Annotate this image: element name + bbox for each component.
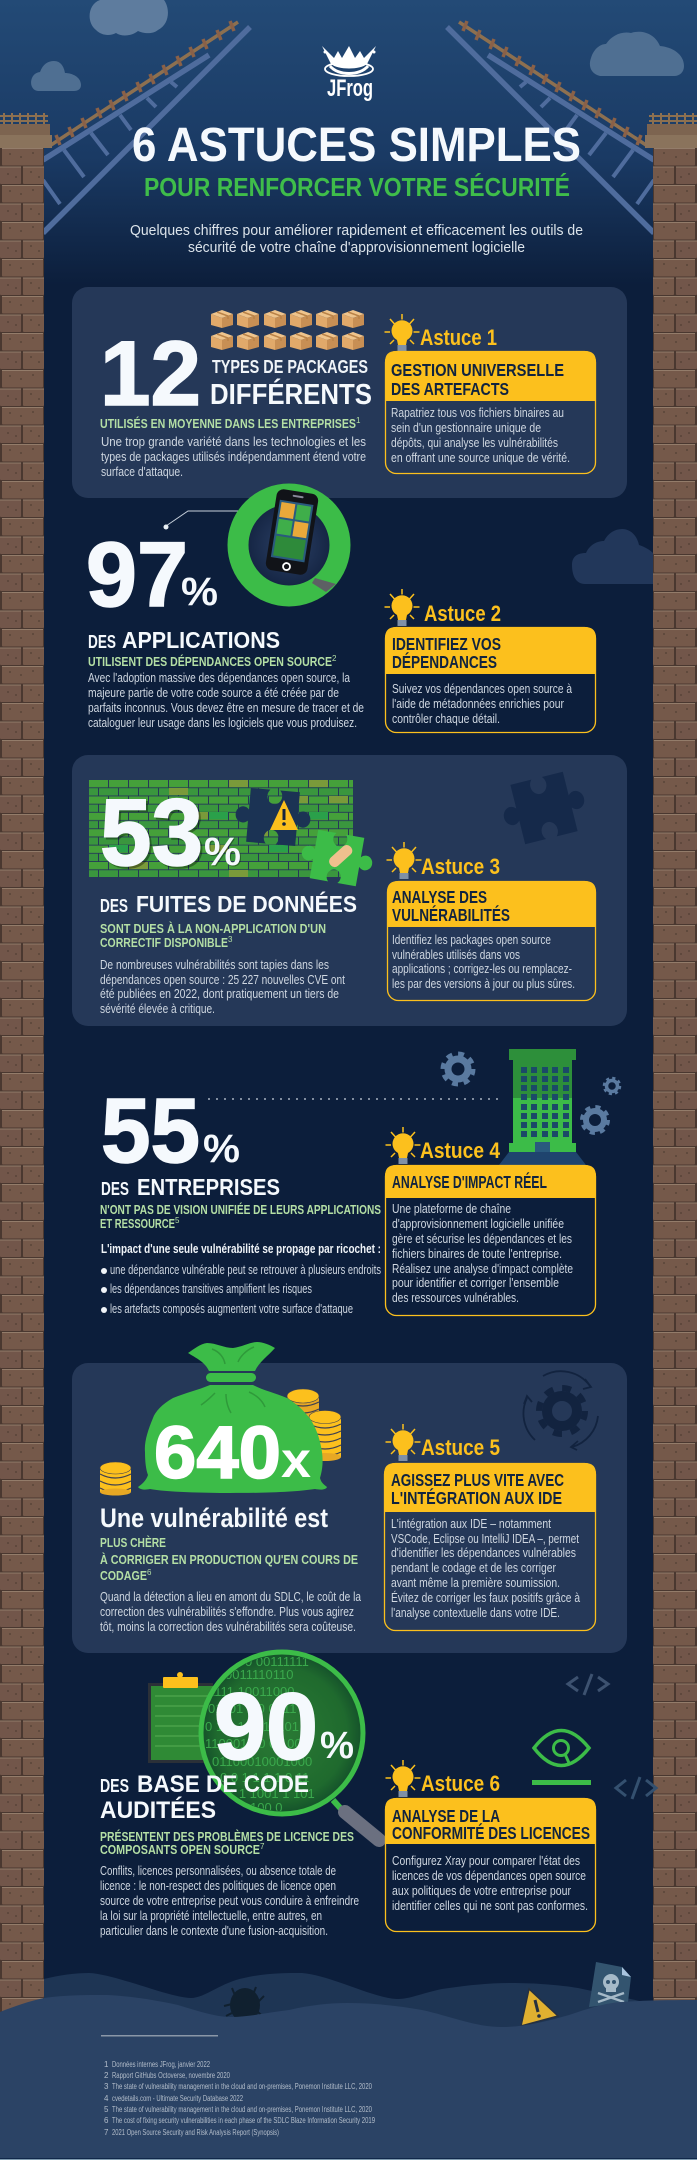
- tip card 3: [387, 881, 596, 1000]
- tip label 5: Astuce 5: [421, 1435, 500, 1460]
- JFrog logo: [322, 46, 376, 102]
- body text 2: parfaits inconnus. Vous devez être en mesure de tracer et de: [88, 701, 364, 715]
- panel: tip 1: [72, 287, 627, 498]
- tip card 4: ANALYSE D'IMPACT RÉEL: [392, 1171, 547, 1192]
- tip card 1: en offrant une source unique de vérité.: [391, 451, 570, 465]
- subtitle: POUR RENFORCER VOTRE SÉCURITÉ: [144, 172, 570, 202]
- tip label 3: Astuce 3: [421, 854, 500, 879]
- title: 6 ASTUCES SIMPLES: [132, 119, 581, 172]
- stat: 640: 640: [154, 1411, 281, 1494]
- connector dot: [164, 524, 168, 530]
- icon: magnifying glass: 110001 10 0 100: [205, 1736, 302, 1751]
- section: tip 2: [86, 488, 653, 732]
- tip card 3: vulnérables utilisés dans vos: [392, 948, 520, 962]
- dotted line: [208, 1098, 504, 1100]
- stat: 90: 90: [214, 1674, 318, 1780]
- icon: magnifying glass: 0 00111111: [245, 1654, 309, 1669]
- tip card 3: applications ; corrigez-les ou remplacez-: [392, 962, 572, 976]
- heading: base de code auditées: [100, 1771, 309, 1824]
- footnote mark 6: 6: [147, 1568, 152, 1577]
- body text 3: sévérité élevée à critique.: [100, 1002, 215, 1016]
- body text 1: Une trop grande variété dans les technologies et les: [101, 435, 366, 449]
- icon: skull document: [589, 1962, 631, 2007]
- tip card 2: IDENTIFIEZ VOS: [392, 634, 501, 654]
- body text 6: licence : le non-respect des politiques de licence open: [100, 1879, 336, 1893]
- footnote mark 1: 1: [356, 416, 361, 425]
- stat: 55: 55: [101, 1080, 200, 1182]
- tip card 3: les par des versions à jour ou plus sûres.: [392, 977, 575, 991]
- icon: eye: [534, 1730, 589, 1766]
- body text 6: la loi sur la propriété intellectuelle, entre autres, en: [100, 1909, 322, 1923]
- tip card 6: ANALYSE DE LA: [392, 1806, 500, 1826]
- heading: base de code auditées: BASE DE CODE: [137, 1771, 309, 1798]
- subheading 6: COMPOSANTS OPEN SOURCE: [100, 1842, 260, 1857]
- references: 6: [104, 2116, 109, 2125]
- drawbridge: left: [43, 21, 250, 233]
- references: cvedetails.com - Ultimate Security Database 2022: [112, 2094, 243, 2103]
- references: Données internes JFrog, janvier 2022: [112, 2060, 210, 2069]
- tip card 5: L'INTÉGRATION AUX IDE: [391, 1487, 562, 1508]
- body text 2: majeure partie de votre code source a été créée par de: [88, 686, 339, 700]
- icon: light bulb 3: [386, 842, 422, 879]
- icon: light bulb 6: [386, 1760, 420, 1797]
- tip card 5: AGISSEZ PLUS VITE AVEC: [391, 1470, 564, 1490]
- intro text: Quelques chiffres pour améliorer rapidement et efficacement les outils de: [130, 223, 583, 239]
- body text 2: [88, 671, 364, 730]
- references: 7: [104, 2128, 109, 2137]
- bullet list: [101, 1263, 381, 1316]
- tip card 6: aux politiques de votre entreprise pour: [392, 1884, 571, 1898]
- cloud: right large: [590, 32, 684, 76]
- tip card 5: [384, 1463, 596, 1630]
- icon: magnifying glass: 1 1 1001 1 101: [228, 1786, 315, 1801]
- icon: light bulb 2: [384, 589, 420, 626]
- references: [104, 2060, 375, 2137]
- body text 5: correction des vulnérabilités s'effondre. Plus vous agirez: [100, 1605, 354, 1619]
- heading: des: DES: [88, 631, 116, 652]
- tip label 6: Astuce 6: [421, 1771, 500, 1796]
- footnote mark 3: 3: [228, 935, 233, 944]
- icon: code tag right: [616, 1777, 656, 1799]
- icon: magnifying glass: 0 1 0 1 1010101: [205, 1719, 299, 1734]
- icon: clipboard: [148, 1672, 213, 1763]
- body text 2: Avec l'adoption massive des dépendances open source, la: [88, 671, 350, 685]
- front wave: [0, 1995, 697, 2160]
- references: 4: [104, 2094, 109, 2103]
- references: 2: [104, 2071, 109, 2080]
- body text 6: [100, 1864, 359, 1938]
- subheading 5: PLUS CHÈRE: [100, 1535, 166, 1550]
- subheading 4: ET RESSOURCE: [100, 1216, 175, 1231]
- subheading 6: [100, 1829, 354, 1857]
- body text 3: dépendances open source : 25 227 nouvelles CVE ont: [100, 973, 345, 987]
- footnote mark 7: 7: [260, 1842, 265, 1851]
- body text 1: surface d'attaque.: [101, 465, 183, 479]
- tip card 2: DÉPENDANCES: [392, 651, 497, 672]
- tip card 4: [385, 1165, 596, 1316]
- icon: magnifying glass: [201, 1652, 379, 1840]
- references: The state of vulnerability management in the cloud and on-premises, Ponemon Institute LLC, 2020: [112, 2082, 372, 2091]
- tip card 5: pendant le codage et de les corriger: [391, 1561, 556, 1575]
- tip card 2: [385, 627, 596, 732]
- subheading 6: PRÉSENTENT DES PROBLÈMES DE LICENCE DES: [100, 1829, 354, 1844]
- references: The cost of fixing security vulnerabilities in each phase of the SDLC Blaze Information Security 2019: [112, 2116, 375, 2125]
- tip card 3: VULNÉRABILITÉS: [392, 904, 510, 925]
- icon: bug: [224, 1987, 264, 2022]
- tip card 4: Réalisez une analyse d'impact complète: [392, 1262, 573, 1276]
- subheading 5: [100, 1535, 358, 1583]
- icon: gear small: [604, 1078, 620, 1094]
- tip card 6: [385, 1798, 596, 1932]
- tip card 1: dépôts, qui analyse les vulnérabilités: [391, 436, 558, 450]
- body text 3: [100, 958, 345, 1016]
- subheading 5: À CORRIGER EN PRODUCTION QU'EN COURS DE: [100, 1552, 358, 1567]
- tip card 1: GESTION UNIVERSELLE: [391, 360, 564, 380]
- icon: coin stacks right: [287, 1389, 341, 1461]
- tip card 1: [385, 351, 596, 474]
- body text 2: cataloguer leur usage dans les logiciels que vous produisez.: [88, 716, 357, 730]
- heading: différents: DIFFÉRENTS: [210, 377, 372, 411]
- tip card 1: sein d'un gestionnaire unique de: [391, 421, 541, 435]
- icon: magnifying glass: 01100010001000: [212, 1754, 312, 1769]
- icon: magnifying glass: 0011110110: [225, 1667, 293, 1682]
- tip card 5: avant même la première soumission.: [391, 1576, 560, 1590]
- back wave: [44, 1973, 653, 2040]
- references: Rapport GitHubs Octoverse, novembre 2020: [112, 2071, 230, 2080]
- body text 3: De nombreuses vulnérabilités sont tapies dans les: [100, 958, 329, 972]
- drawbridge: right: [447, 21, 654, 233]
- stat multiplier: x: [281, 1432, 311, 1488]
- icon: magnifying glass: 01101 0 0 0011: [208, 1701, 296, 1716]
- icon: warning sign: [521, 1989, 558, 2026]
- percent sign: %: [320, 1725, 354, 1767]
- tip card 5: d'identifier les dépendances vulnérables: [391, 1546, 576, 1560]
- icon: magnifying glass: 100 0: [250, 1800, 283, 1815]
- tip card 2: l'aide de métadonnées enrichies pour: [392, 697, 564, 711]
- tip card 4: pour identifier et corriger l'ensemble: [392, 1276, 559, 1290]
- body text 6: source de votre entreprise peut vous conduire à enfreindre: [100, 1894, 359, 1908]
- body text 5: [100, 1590, 361, 1634]
- body text 1: types de packages utilisés indépendamment étend votre: [101, 450, 366, 464]
- icon: twelve packages: [211, 310, 364, 350]
- body text 6: Conflits, licences personnalisées, ou absence totale de: [100, 1864, 336, 1878]
- impact sentence: L'impact d'une seule vulnérabilité se propage par ricochet :: [101, 1242, 381, 1256]
- tip card 6: licences de vos dépendances open source: [392, 1869, 586, 1883]
- tip card 5: l'analyse contextuelle dans votre IDE.: [391, 1606, 560, 1620]
- heading: applications: APPLICATIONS: [122, 627, 280, 653]
- icon: light bulb 1: [384, 314, 420, 351]
- subheading 1: UTILISÉS EN MOYENNE DANS LES ENTREPRISES: [100, 416, 356, 431]
- connector line: [166, 511, 252, 526]
- icon: money bag: [138, 1342, 327, 1493]
- footnote mark 5: 5: [175, 1216, 180, 1225]
- icon: magnifying glass: 1111 10011000: [208, 1684, 295, 1699]
- tip card 5: Évitez de corriger les faux positifs grâce à: [391, 1590, 580, 1605]
- icon: code tag top: [568, 1674, 608, 1695]
- tip label 2: Astuce 2: [424, 601, 501, 626]
- tip card 3: ANALYSE DES: [392, 887, 487, 907]
- icon: gear medium: [582, 1107, 608, 1133]
- tip card 2: contrôler chaque détail.: [392, 712, 500, 726]
- subheading 3: CORRECTIF DISPONIBLE: [100, 935, 228, 950]
- subheading 5: CODAGE: [100, 1568, 147, 1583]
- bullet list: les dépendances transitives amplifient les risques: [110, 1282, 312, 1296]
- heading: base de code auditées: AUDITÉES: [100, 1796, 216, 1824]
- panel: tip 3: [72, 755, 627, 1026]
- bullet list: les artefacts composés augmentent votre surface d'attaque: [110, 1302, 353, 1316]
- tip card 6: Configurez Xray pour comparer l'état des: [392, 1854, 580, 1868]
- tip card 6: CONFORMITÉ DES LICENCES: [392, 1822, 590, 1843]
- icon: dark gear with arrows: [523, 1371, 598, 1450]
- icon: light bulb 4: [386, 1127, 420, 1164]
- intro text: [130, 223, 583, 256]
- icon: magnifying glass: 0 0 1 1 1 1 0 11: [220, 1770, 309, 1785]
- tip card 6: identifier celles qui ne sont pas conformes.: [392, 1899, 588, 1913]
- intro text: sécurité de votre chaîne d'approvisionnement logicielle: [188, 240, 525, 256]
- tip card 2: Suivez vos dépendances open source à: [392, 682, 572, 696]
- stat: 97: 97: [86, 524, 188, 626]
- tip card 4: d'approvisionnement logicielle unifiée: [392, 1217, 564, 1231]
- brick tower: right: [645, 113, 697, 2018]
- tip card 4: fichiers binaires de toute l'entreprise.: [392, 1247, 562, 1261]
- body text 5: Quand la détection a lieu en amont du SDLC, le coût de la: [100, 1590, 361, 1604]
- bullet list: une dépendance vulnérable peut se retrouver à plusieurs endroits: [110, 1263, 381, 1277]
- references: 1: [104, 2060, 109, 2069]
- section: tip 6: [100, 1652, 656, 1938]
- brick tower: left: [0, 113, 52, 2018]
- references: 5: [104, 2105, 109, 2114]
- panel: tip 5: [72, 1342, 627, 1653]
- stat: 53: 53: [100, 780, 203, 886]
- body text 3: été publiées en 2022, dont pratiquement un tiers de: [100, 987, 339, 1001]
- icon: dark puzzle piece with warning: [233, 787, 313, 847]
- heading: entreprises: ENTREPRISES: [137, 1174, 280, 1200]
- subheading 3: SONT DUES À LA NON-APPLICATION D'UN: [100, 921, 326, 936]
- heading: des: DES: [100, 895, 128, 916]
- heading: des: DES: [101, 1178, 129, 1199]
- references: 3: [104, 2082, 109, 2091]
- percent sign: %: [204, 830, 241, 874]
- body text 1: [101, 435, 366, 479]
- references: The state of vulnerability management in the cloud and on-premises, Ponemon Institute LLC, 2020: [112, 2105, 372, 2114]
- cloud: top left: [90, 0, 168, 35]
- tip card 4: gère et sécurise les dépendances et les: [392, 1232, 572, 1246]
- cloud: right dark: [572, 529, 653, 584]
- night sky gradient: [0, 0, 697, 285]
- heading: une vulnérabilité est: Une vulnérabilité est: [100, 1503, 328, 1533]
- icon: phone in donut: [238, 488, 340, 596]
- tip card 4: des ressources vulnérables.: [392, 1291, 519, 1305]
- illustration: green wall: [89, 780, 353, 877]
- subheading 2: UTILISENT DES DÉPENDANCES OPEN SOURCE: [88, 654, 332, 669]
- section: tip 4: [100, 1049, 620, 1316]
- heading: types de packages: TYPES DE PACKAGES: [212, 357, 368, 377]
- tip card 5: VSCode, Eclipse ou IntelliJ IDEA –, permet: [391, 1532, 579, 1546]
- tip card 3: Identifiez les packages open source: [392, 933, 551, 947]
- tip card 4: Une plateforme de chaîne: [392, 1202, 511, 1216]
- subheading 4: [100, 1202, 381, 1231]
- percent sign: %: [181, 570, 218, 614]
- body text 5: tôt, moins la correction des vulnérabilités sera coûteuse.: [100, 1620, 356, 1634]
- stat: 12: 12: [100, 323, 201, 425]
- footnote mark 2: 2: [332, 654, 337, 663]
- tip label 4: Astuce 4: [420, 1138, 501, 1163]
- heading: fuites de données: FUITES DE DONNÉES: [136, 890, 357, 917]
- icon: green puzzle with bandage: [298, 828, 376, 888]
- illustration: green building: [499, 1049, 586, 1165]
- icon: gear large: [443, 1054, 473, 1084]
- green bar: [532, 1780, 591, 1785]
- tip label 1: Astuce 1: [420, 325, 497, 350]
- tip card 5: L'intégration aux IDE – notamment: [391, 1517, 551, 1531]
- heading: des: DES: [100, 1775, 129, 1796]
- tip card 1: DES ARTEFACTS: [391, 379, 509, 399]
- tip card 1: Rapatriez tous vos fichiers binaires au: [391, 406, 564, 420]
- subheading 3: [100, 921, 326, 950]
- icon: light bulb 5: [386, 1424, 420, 1461]
- subheading 4: N'ONT PAS DE VISION UNIFIÉE DE LEURS APPLICATIONS: [100, 1202, 381, 1217]
- icon: large dark puzzle piece: [497, 768, 591, 848]
- icon: coin stack left: [100, 1462, 131, 1496]
- cloud: left small: [31, 61, 81, 91]
- body text 6: particulier dans le contexte d'une fusion-acquisition.: [100, 1924, 328, 1938]
- references: 2021 Open Source Security and Risk Analysis Report (Synopsis): [112, 2128, 279, 2137]
- footnote divider: [101, 2035, 218, 2036]
- percent sign: %: [203, 1127, 240, 1171]
- JFrog logo: JFrog: [327, 75, 373, 102]
